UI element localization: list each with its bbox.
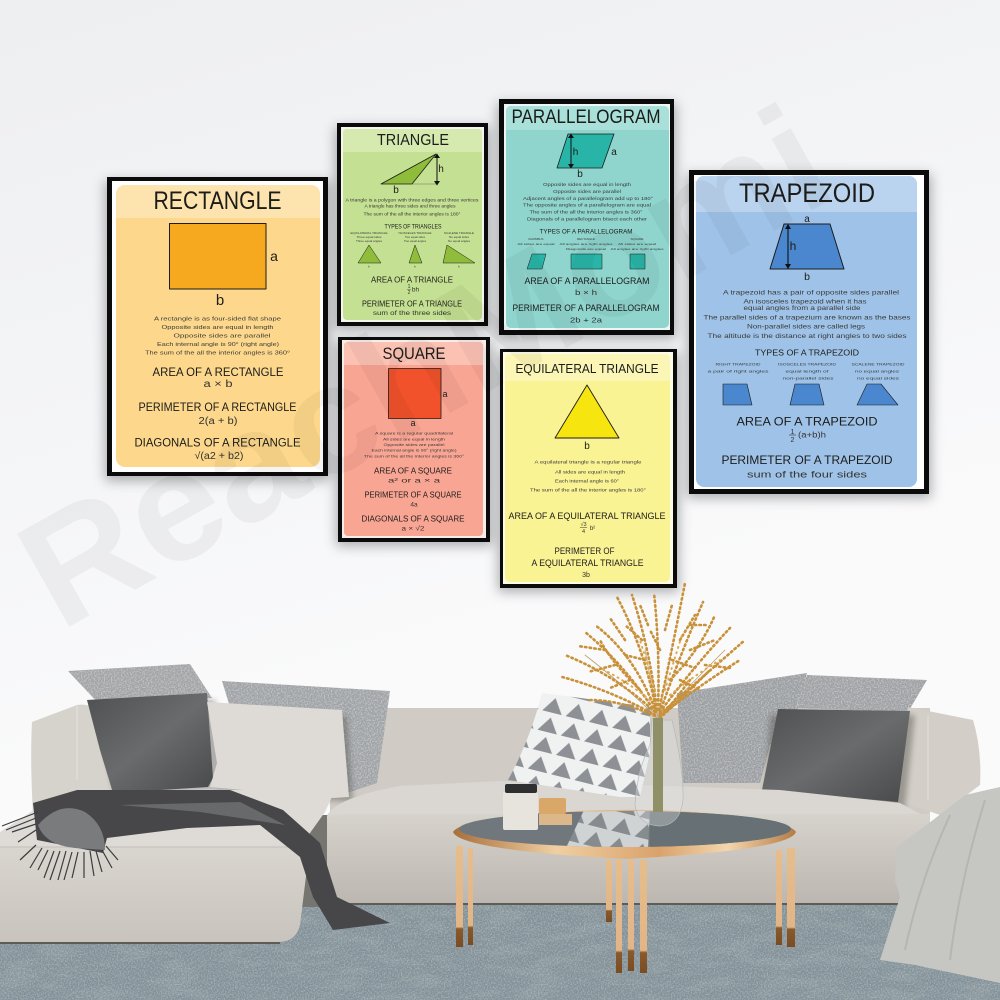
trapezoid diagram: h <box>790 239 796 253</box>
triangle types: Three equal sides <box>356 235 382 239</box>
heading: rectangle: RECTANGLE <box>154 187 282 215</box>
parallelogram formulas: 2b + 2a <box>570 316 603 324</box>
trapezoid diagram <box>770 214 844 283</box>
patterned cushion <box>508 693 650 797</box>
plant <box>562 583 745 718</box>
square formulas: DIAGONALS OF A SQUARE <box>362 514 464 524</box>
rectangle properties: Each internal angle is 90° (right angle) <box>157 342 279 348</box>
trapezoid diagram: a <box>804 214 810 225</box>
gap shadow between seats <box>292 815 332 907</box>
parallelogram properties: Opposite sides are equal in length <box>543 182 632 187</box>
trapezoid properties: A trapezoid has a pair of opposite sides parallel <box>723 290 900 296</box>
triangle types: ISOSCELES TRIANGLE <box>398 231 432 235</box>
equilateral triangle properties: Each internal angle is 60° <box>555 478 619 484</box>
right dark cushion <box>762 709 910 802</box>
triangle diagram: h <box>438 164 444 175</box>
triangle properties: The sum of the all the interior angles is 180° <box>364 212 461 216</box>
equilateral triangle formulas: 3b <box>582 572 590 579</box>
triangle diagram: b <box>393 185 399 196</box>
heading: equilateral triangle: EQUILATERAL TRIANGLE <box>516 362 658 376</box>
square diagram: a <box>442 389 448 399</box>
trapezoid types: no equal angles <box>855 368 899 374</box>
triangle properties <box>346 198 479 216</box>
poster: trapezoid <box>689 170 929 494</box>
trapezoid formulas <box>722 416 892 480</box>
square formulas: 4a <box>410 502 418 508</box>
triangle formulas: AREA OF A TRIANGLE <box>371 274 453 284</box>
table surface <box>453 808 796 859</box>
parallelogram formulas: b × h <box>575 288 597 297</box>
square properties: A square is a regular quadrilateral <box>375 430 453 436</box>
equilateral triangle properties <box>530 460 646 494</box>
poster: rectangle <box>107 177 328 476</box>
poster: parallelogram <box>499 99 674 335</box>
square diagram: a <box>410 418 416 428</box>
parallelogram properties: Adjacent angles of a parallelogram add up to 180° <box>523 196 653 201</box>
triangle properties: A triangle is a polygon with three edges and three vertices <box>346 198 479 202</box>
rectangle properties: Opposite sides are equal in length <box>162 325 274 331</box>
rug <box>0 903 1000 1000</box>
square properties: Each internal angle is 90° (right angle) <box>372 448 457 452</box>
triangle diagram <box>381 154 444 196</box>
sofa <box>0 660 980 943</box>
triangle formulas: PERIMETER OF A TRIANGLE <box>362 298 462 308</box>
trapezoid formulas: (a+b)h <box>798 430 826 440</box>
parallelogram properties: Opposite sides are parallel <box>553 189 621 194</box>
equilateral triangle properties: A equilateral triangle is a regular triangle <box>534 460 642 466</box>
parallelogram diagram: a <box>611 147 617 158</box>
rectangle formulas: a × b <box>204 379 233 390</box>
sofa back <box>330 708 930 815</box>
rectangle properties: Opposite sides are parallel <box>174 334 270 340</box>
right arm <box>897 707 980 815</box>
heading: parallelogram: PARALLELOGRAM <box>512 107 660 128</box>
trapezoid properties: equal angles from a parallel side <box>744 305 861 312</box>
parallelogram types: RECTANGLE <box>577 237 595 241</box>
parallelogram diagram <box>557 134 617 180</box>
parallelogram diagram: b <box>577 169 583 180</box>
trapezoid types: a pair of right angles <box>708 368 768 374</box>
trapezoid types: RIGHT TRAPEZOID <box>716 362 761 366</box>
square formulas: PERIMETER OF A SQUARE <box>364 490 462 500</box>
trapezoid diagram: b <box>804 271 810 283</box>
watermark: ReachMomi <box>0 72 857 661</box>
parallelogram properties: The opposite angles of a parallelogram are equal <box>523 202 651 208</box>
gold box <box>539 798 572 825</box>
poster: square <box>338 337 490 542</box>
parallelogram formulas <box>512 276 660 324</box>
rectangle formulas: AREA OF A RECTANGLE <box>152 367 284 379</box>
square properties: The sum of the all the interior angles is 360° <box>364 454 465 458</box>
rectangle formulas: PERIMETER OF A RECTANGLE <box>138 402 297 414</box>
trapezoid properties: The parallel sides of a trapezium are known as the bases <box>704 314 911 322</box>
heading: square: SQUARE <box>382 345 446 363</box>
right seat top <box>327 781 922 825</box>
rectangle formulas: 2(a + b) <box>198 416 238 427</box>
trapezoid properties <box>704 290 911 340</box>
poster: equilateral triangle <box>500 349 677 588</box>
square properties <box>364 430 465 458</box>
square formulas: a² or a × a <box>388 478 441 484</box>
triangle types: TYPES OF TRIANGLES <box>384 224 442 230</box>
rectangle formulas <box>134 367 301 462</box>
triangle types: b <box>368 264 370 268</box>
equilateral triangle properties: The sum of the all the interior angles is 180° <box>530 488 646 494</box>
square formulas: a × √2 <box>402 524 425 532</box>
chaise seat top <box>0 790 335 847</box>
frame shadows <box>105 103 931 592</box>
left dark cushion <box>87 693 213 793</box>
triangle types: Two equal angles <box>404 239 427 243</box>
parallelogram formulas: AREA OF A PARALLELOGRAM <box>524 276 650 287</box>
triangle types: No equal sides <box>449 235 470 239</box>
blanket fringe <box>2 812 118 880</box>
triangle properties: A triangle has three sides and three angles <box>364 204 456 208</box>
triangle types: Two equal sides <box>405 235 426 239</box>
equilateral triangle formulas: PERIMETER OF <box>554 546 615 556</box>
equilateral triangle properties: All sides are equal in length <box>555 470 625 476</box>
equilateral triangle diagram <box>555 385 619 452</box>
rectangle properties: The sum of the all the interior angles is 360° <box>145 350 290 356</box>
parallelogram types: All sides are equal <box>518 242 555 246</box>
parallelogram properties <box>523 182 653 222</box>
parallelogram diagram: h <box>573 147 578 158</box>
heading: triangle: TRIANGLE <box>377 132 449 149</box>
parallelogram types: All sides are equal <box>618 242 657 246</box>
trapezoid types: non-parallel sides <box>782 376 834 380</box>
parallelogram types: All angles are right angles <box>610 247 664 251</box>
square formulas <box>362 466 464 532</box>
trapezoid types: no equal sides <box>857 376 899 380</box>
trapezoid formulas: 1 <box>791 429 795 436</box>
light cushion <box>207 702 349 798</box>
parallelogram properties: Diagonals of a parallelogram bisect each other <box>527 216 648 222</box>
equilateral triangle formulas <box>508 511 666 579</box>
light throw blanket <box>880 787 1000 983</box>
rectangle diagram: a <box>270 248 278 264</box>
triangle types: Three equal angles <box>356 239 383 243</box>
trapezoid types <box>708 348 905 405</box>
trapezoid formulas: AREA OF A TRAPEZOID <box>736 416 878 428</box>
triangle types: No equal angles <box>448 239 471 243</box>
rectangle formulas: √(a2 + b2) <box>194 450 244 462</box>
rectangle properties: A rectangle is as four-sided flat shape <box>154 316 281 322</box>
equilateral triangle formulas: A EQUILATERAL TRIANGLE <box>532 558 644 568</box>
triangle types: b <box>414 264 416 268</box>
trapezoid properties: An isosceles trapezoid when it has <box>744 298 867 306</box>
parallelogram types: Diagonals are equal <box>566 247 607 251</box>
square properties: All sides are equal in length <box>383 436 445 442</box>
triangle formulas: sum of the three sides <box>373 310 452 317</box>
rectangle properties <box>145 316 290 356</box>
poster: triangle <box>337 123 488 326</box>
left arm <box>31 705 115 815</box>
square diagram <box>388 368 448 428</box>
parallelogram types: TYPES OF A PARALLELOGRAM <box>540 228 632 236</box>
equilateral triangle formulas: AREA OF A EQUILATERAL TRIANGLE <box>508 511 666 521</box>
dark throw blanket <box>2 790 390 930</box>
parallelogram types: RHOMBUS <box>528 237 544 241</box>
triangle formulas <box>362 274 462 317</box>
parallelogram formulas: PERIMETER OF A PARALLELOGRAM <box>512 303 660 314</box>
square formulas: AREA OF A SQUARE <box>374 466 452 476</box>
vase <box>635 718 683 826</box>
rectangle diagram: b <box>216 292 224 309</box>
rectangle formulas: DIAGONALS OF A RECTANGLE <box>134 438 301 450</box>
triangle types: SCALENE TRIANGLE <box>444 231 474 235</box>
equilateral triangle formulas: √3 <box>580 521 587 528</box>
triangle formulas: 1 <box>408 284 411 290</box>
trapezoid types: TYPES OF A TRAPEZOID <box>755 348 859 358</box>
equilateral triangle formulas: 4 <box>582 529 585 535</box>
trapezoid types: ISOSCELES TRAPEZOID <box>778 362 836 366</box>
parallelogram properties: The sum of the all the interior angles is 360° <box>530 210 643 214</box>
candle jar <box>503 784 538 830</box>
parallelogram types: SQUARE <box>630 237 644 241</box>
trapezoid formulas: sum of the four sides <box>747 470 867 480</box>
trapezoid formulas: PERIMETER OF A TRAPEZOID <box>722 455 892 467</box>
rectangle diagram <box>170 224 278 309</box>
triangle formulas: bh <box>412 286 419 294</box>
equilateral triangle formulas: b² <box>590 526 595 532</box>
parallelogram types: All angles are right angles <box>560 242 613 246</box>
cushion shadows <box>95 700 915 808</box>
trapezoid properties: Non-parallel sides are called legs <box>747 324 866 330</box>
chaise front <box>0 847 307 942</box>
triangle types: b <box>458 264 460 268</box>
triangle types: EQUILATERAL TRIANGLE <box>350 231 388 235</box>
trapezoid types: SCALENE TRAPEZOID <box>852 362 905 366</box>
heading: trapezoid: TRAPEZOID <box>739 178 875 208</box>
parallelogram types <box>518 228 664 269</box>
triangle formulas: 2 <box>408 290 411 296</box>
right seat front <box>327 814 930 903</box>
trapezoid types: equal length of <box>786 368 830 374</box>
triangle types <box>350 224 475 268</box>
trapezoid properties: The altitude is the distance at right angles to two sides <box>708 333 907 340</box>
gray cushions <box>68 664 927 792</box>
table legs <box>456 846 795 973</box>
trapezoid formulas: 2 <box>791 437 795 444</box>
square properties: Opposite sides are parallel <box>384 442 445 447</box>
equilateral triangle diagram: b <box>584 441 590 452</box>
